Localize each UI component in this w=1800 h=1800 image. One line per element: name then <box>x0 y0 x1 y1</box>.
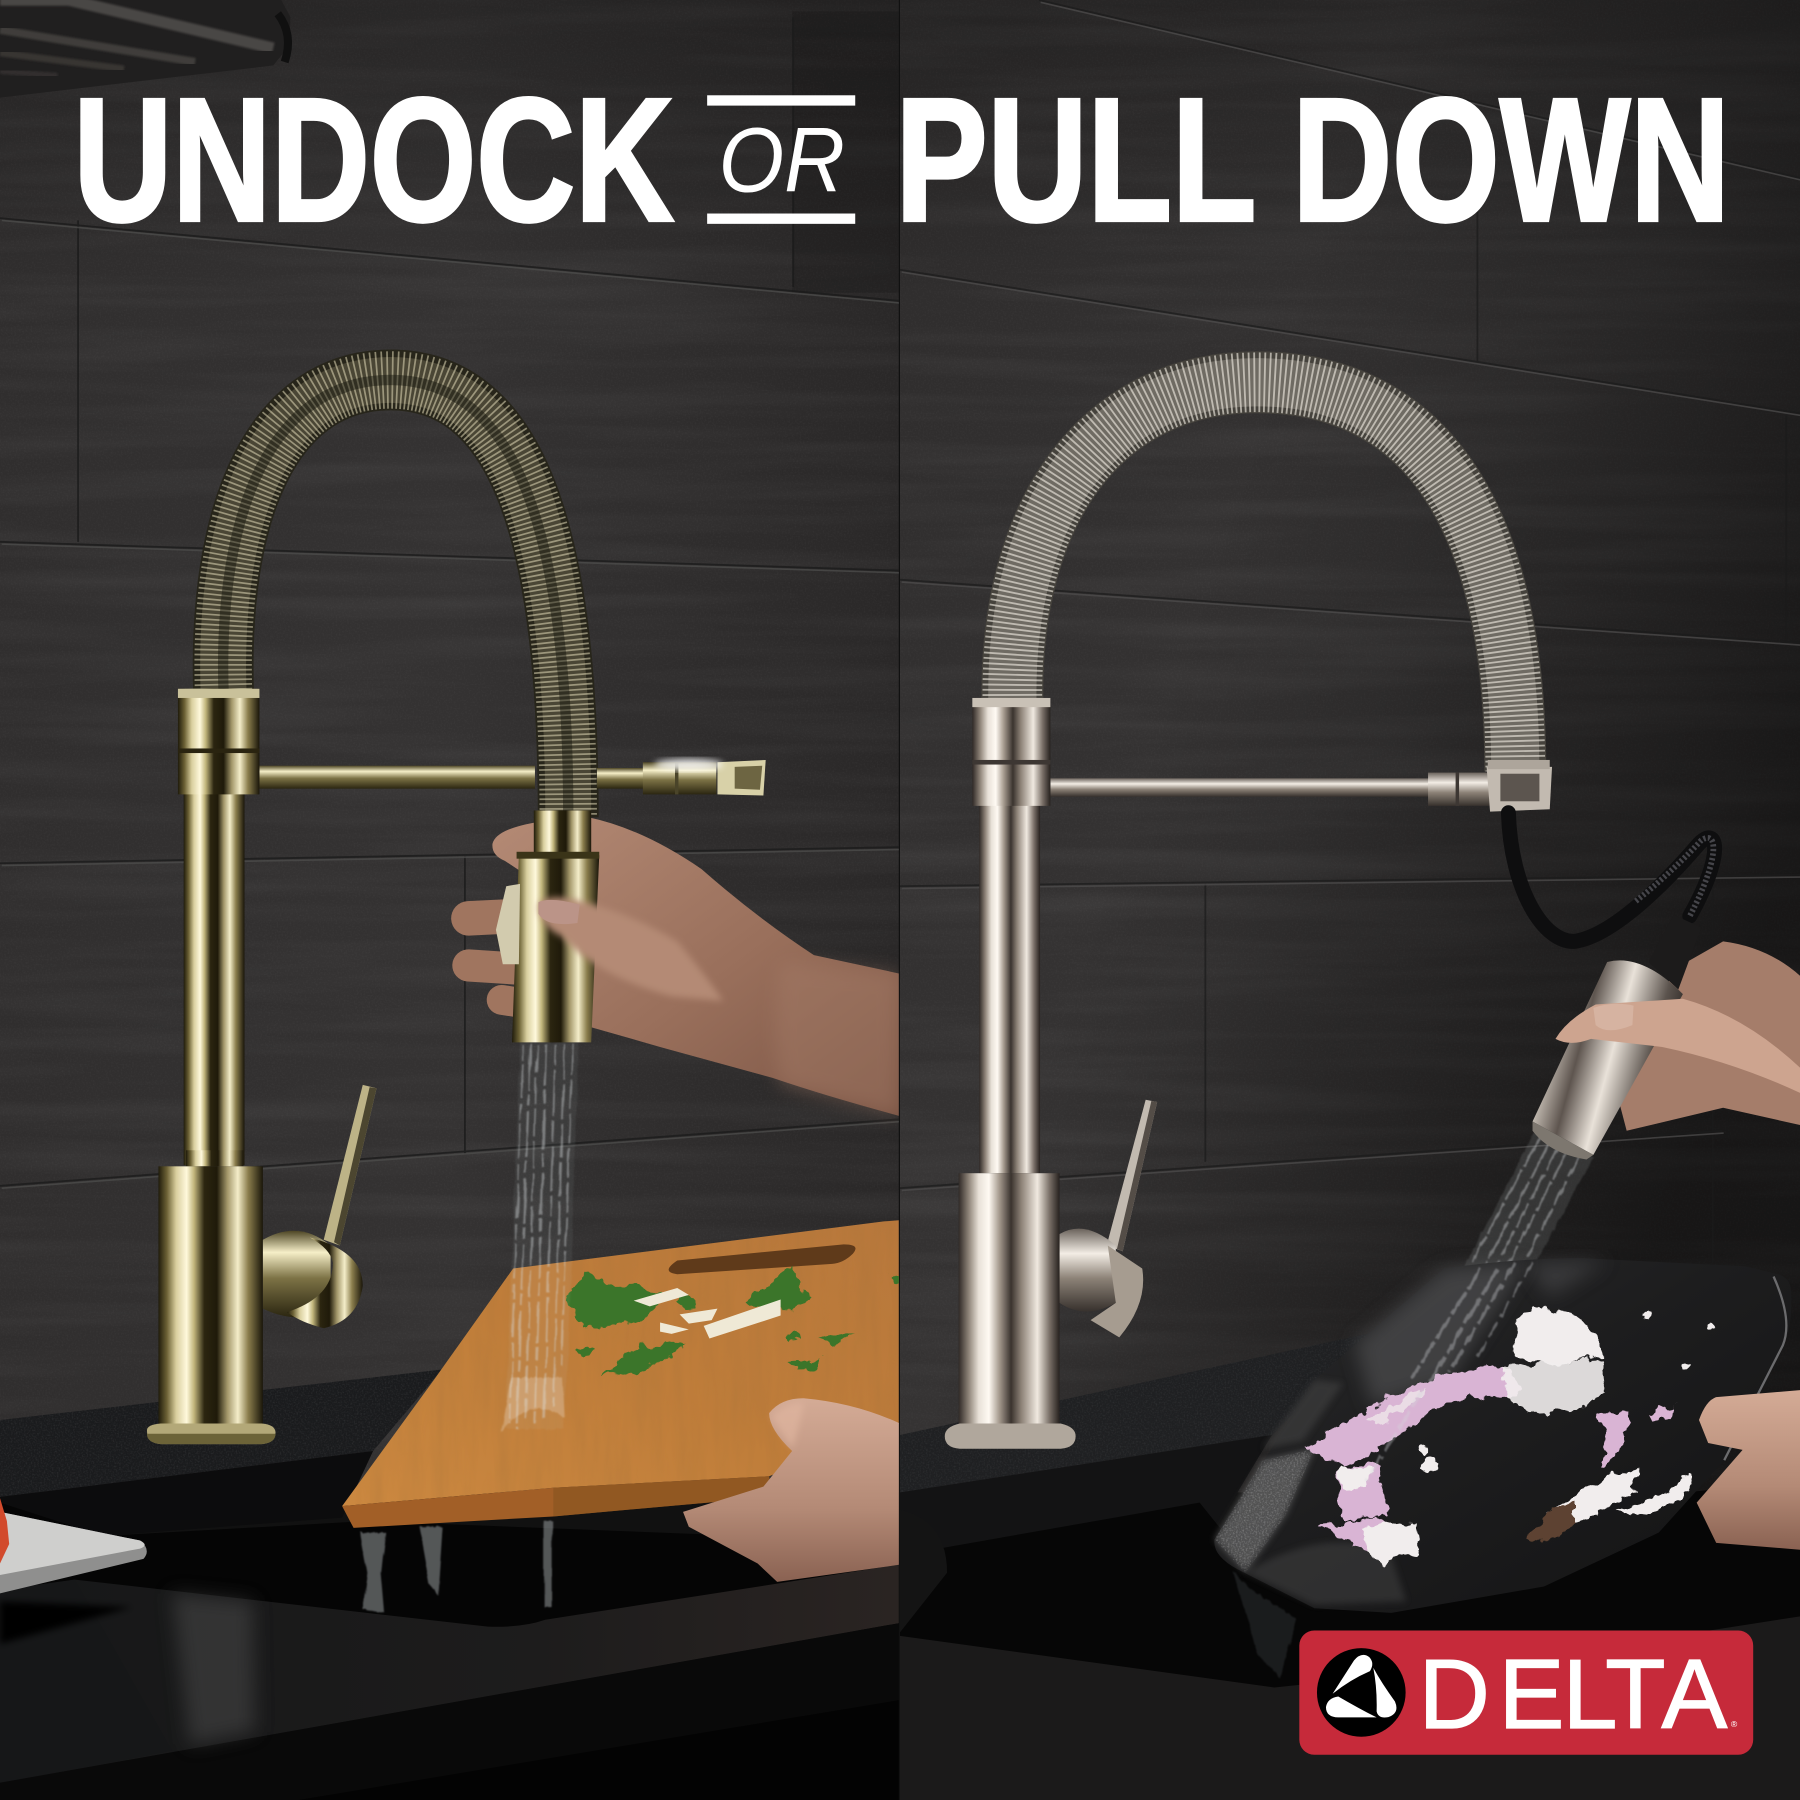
faucet hose right <box>1012 382 1515 771</box>
wall tiles right <box>900 0 1800 1492</box>
spray head left <box>496 810 599 1042</box>
wordmark: DELTA <box>1419 1639 1728 1749</box>
panel: undock photo (left) <box>0 0 901 1800</box>
title <box>73 62 1730 258</box>
logo: delta <box>1299 1630 1753 1755</box>
faucet lever right <box>1060 1100 1157 1337</box>
faucet arm right <box>1050 760 1552 812</box>
faucet hose left <box>223 380 568 817</box>
plate bottom left <box>0 1498 147 1593</box>
faucet lever left <box>263 1085 377 1328</box>
faucet body left <box>147 689 276 1444</box>
lower hand right <box>1697 1390 1800 1550</box>
black braided hose <box>1508 813 1715 941</box>
faucet body right <box>945 698 1076 1449</box>
hand on spray head <box>468 810 899 1116</box>
or word: OR <box>719 110 845 212</box>
wall rack top left <box>0 0 290 98</box>
hand under board <box>683 1398 900 1582</box>
upper hand and spray head right <box>1533 915 1800 1159</box>
panel: pull down photo (right) <box>900 0 1800 1800</box>
water on plate <box>1366 1263 1533 1481</box>
or divider top rule <box>707 95 855 106</box>
herbs and scraps on board <box>568 1266 901 1374</box>
cutting board <box>342 1220 899 1528</box>
headline: undock: UNDOCK <box>73 62 674 258</box>
countertop left <box>0 1370 899 1800</box>
food residue on plate <box>1303 1306 1714 1564</box>
water stream right <box>1464 1131 1593 1268</box>
fingers behind spray head <box>468 915 540 1006</box>
registered mark: ® <box>1731 1719 1738 1729</box>
wall tiles left <box>0 0 901 1492</box>
countertop and sink right <box>900 1332 1800 1800</box>
black plate <box>1214 1258 1791 1613</box>
faucet arm left <box>259 759 766 796</box>
or divider bottom rule <box>707 214 855 224</box>
water drips under board <box>360 1521 552 1613</box>
icon: delta triangle mark <box>1317 1648 1406 1737</box>
water stream left <box>502 1042 579 1432</box>
spray head right <box>1533 915 1701 1159</box>
